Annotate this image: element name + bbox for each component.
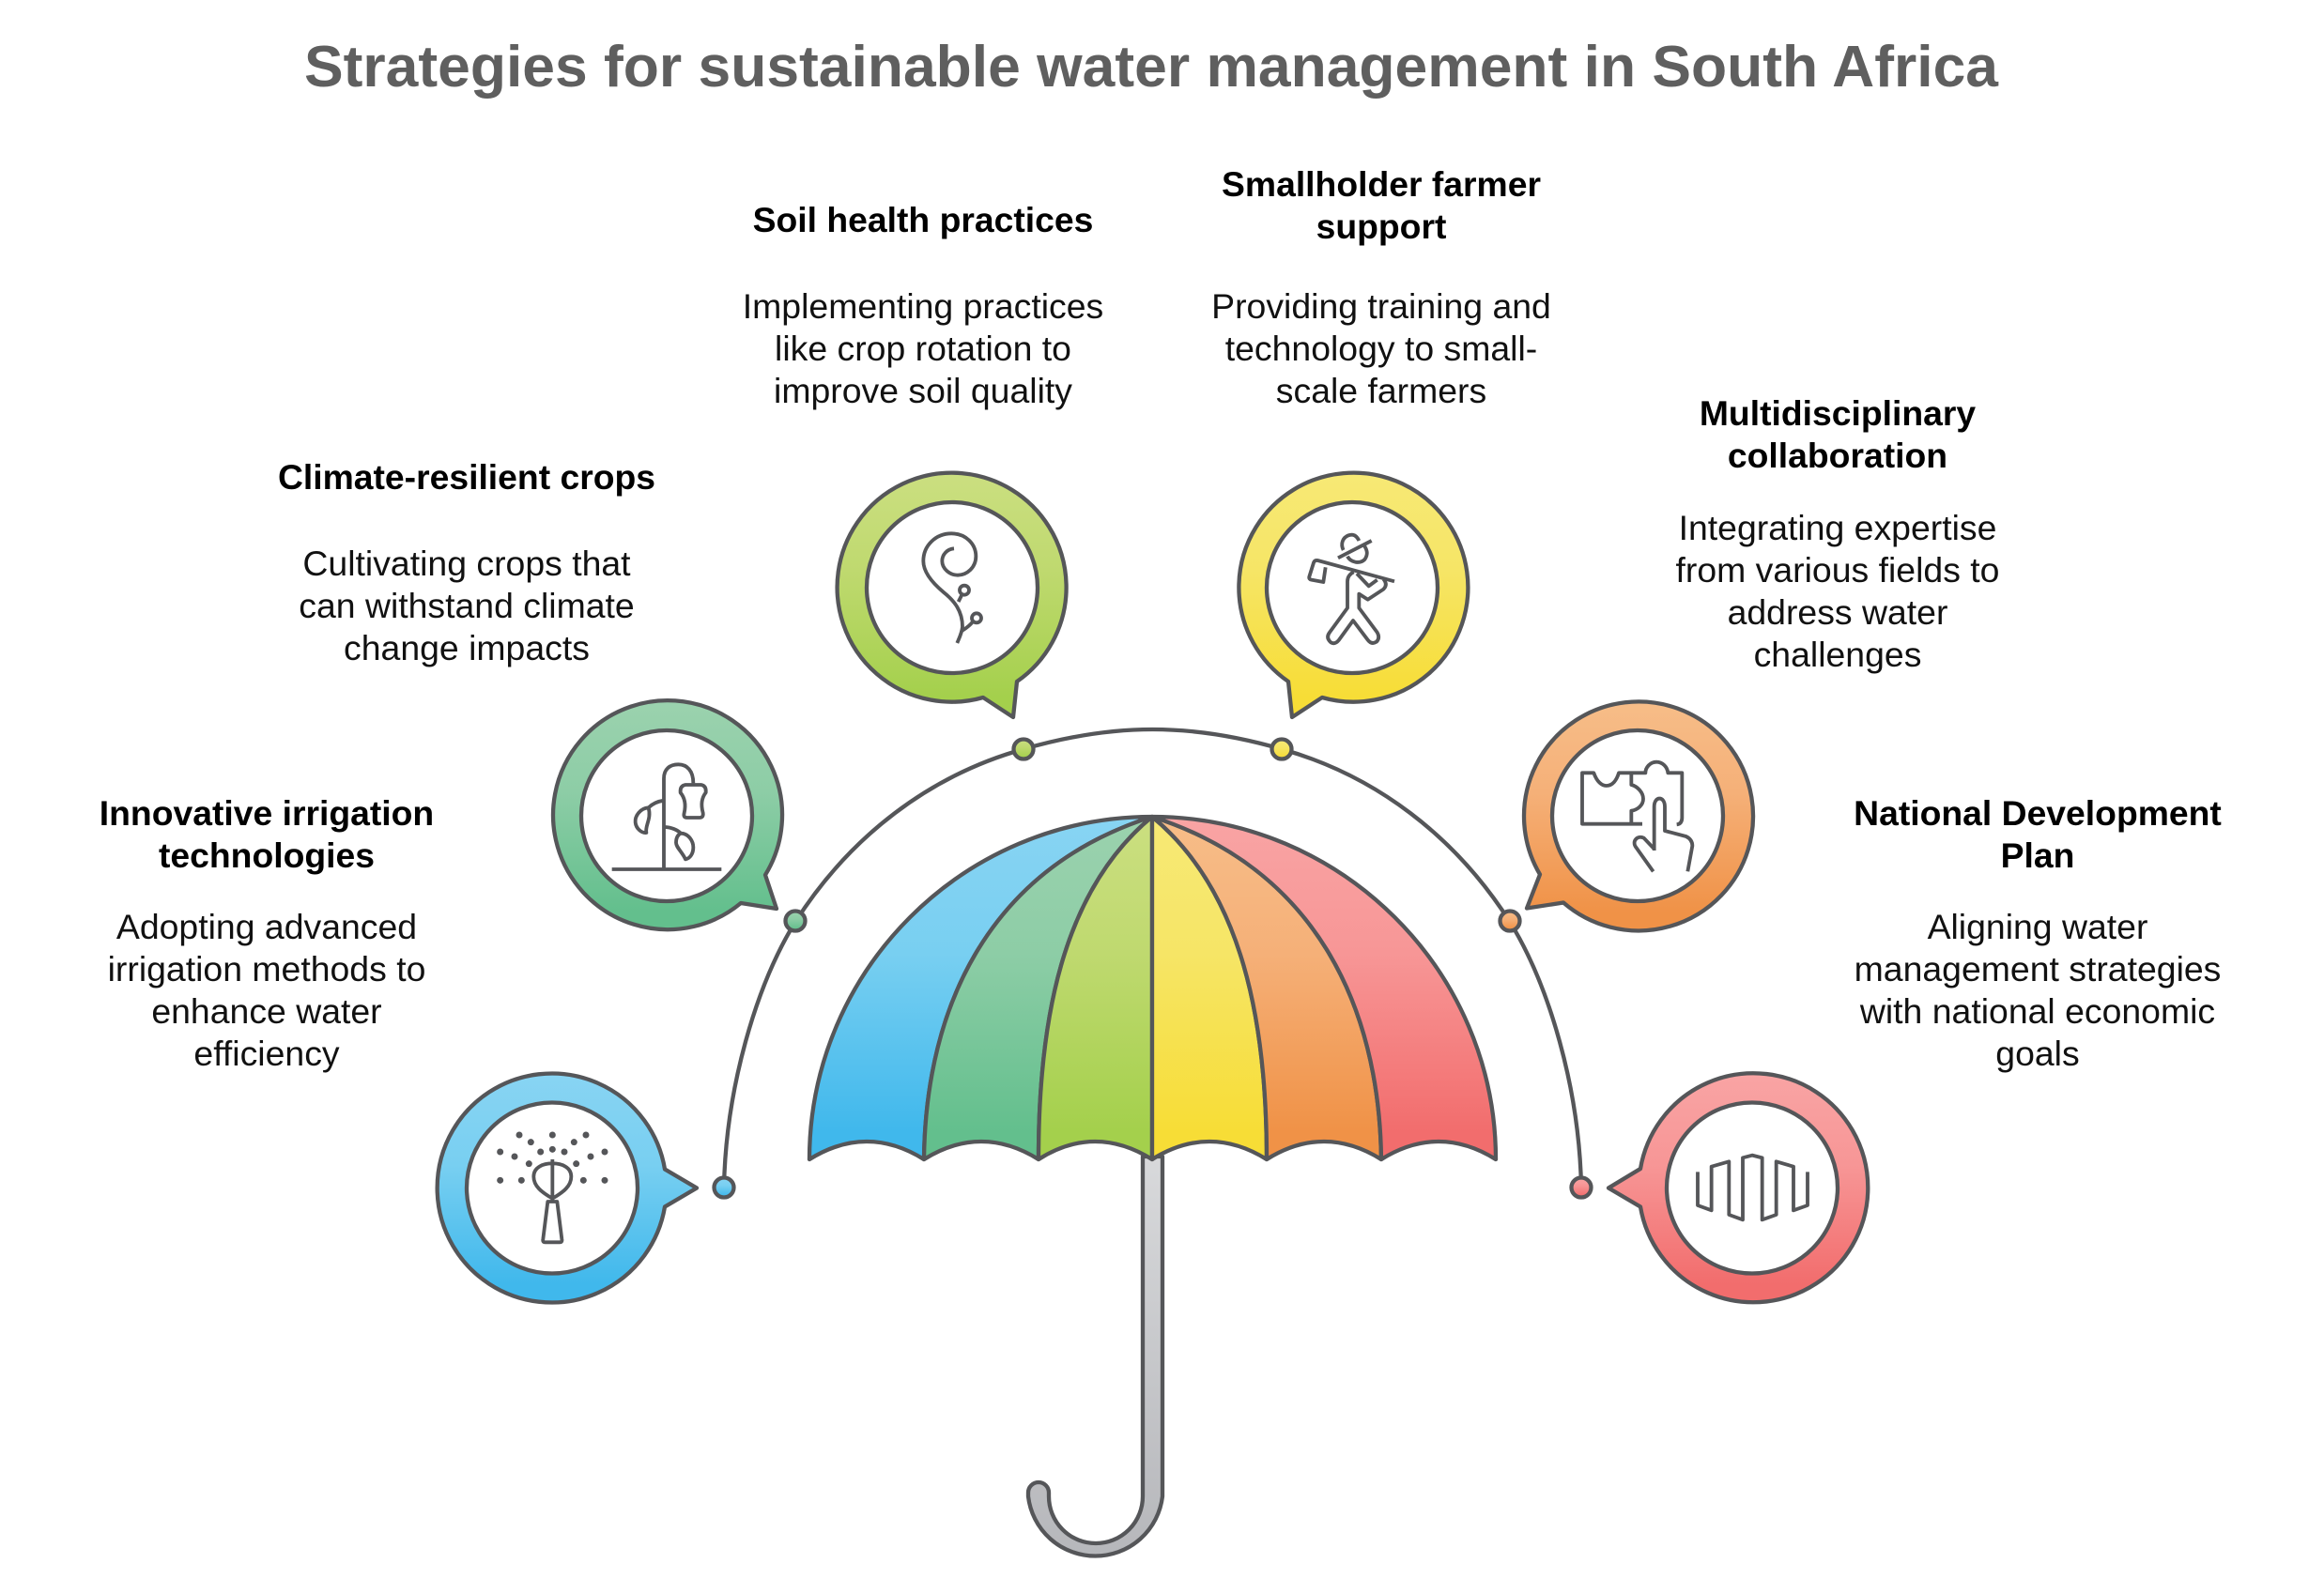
speech bubble: green (553, 700, 782, 929)
label: soil health practices: like crop rotation to (775, 329, 1071, 368)
label: innovative irrigation technologies: enhance water (151, 991, 382, 1031)
item: climate-resilient crops (278, 457, 806, 931)
label: multidisciplinary collaboration: collaboration (1728, 436, 1947, 475)
label: climate-resilient crops (278, 457, 655, 667)
canopy panel: yellow (1152, 817, 1267, 1159)
label: soil health practices (743, 200, 1103, 410)
label: soil health practices: improve soil quality (774, 371, 1072, 410)
connector dot: blue (714, 1177, 734, 1198)
speech bubble: lime (838, 473, 1067, 717)
item: multidisciplinary collaboration (1501, 393, 1999, 931)
label: national development plan: Aligning water (1928, 907, 2147, 946)
label: smallholder farmer support: Smallholder farmer (1222, 164, 1541, 204)
item: innovative irrigation technologies (100, 793, 734, 1302)
item: smallholder farmer support (1211, 164, 1551, 759)
label: national development plan: Plan (2001, 835, 2074, 875)
icon: farmer with hoe (1309, 535, 1394, 643)
connector dot: orange (1501, 911, 1519, 931)
connector dot: red (1572, 1177, 1591, 1198)
canopy panel: lime (1039, 817, 1152, 1159)
label: climate-resilient crops: can withstand climate (299, 586, 635, 625)
umbrella handle (1028, 1157, 1162, 1556)
label: multidisciplinary collaboration: challenges (1754, 635, 1921, 674)
label: national development plan: National Development (1854, 793, 2222, 833)
icon: sprouting spiral (923, 533, 981, 643)
label: national development plan: goals (1995, 1034, 2080, 1073)
title: Strategies for sustainable water management in South Africa (304, 35, 1999, 100)
canopy panel: orange (1152, 817, 1381, 1159)
label: soil health practices: Implementing practices (743, 286, 1103, 326)
label: smallholder farmer support: scale farmers (1276, 371, 1486, 410)
speech bubble: yellow (1239, 473, 1468, 717)
label: smallholder farmer support (1211, 164, 1551, 410)
speech bubble: red (1608, 1073, 1868, 1302)
label: innovative irrigation technologies: efficiency (193, 1034, 340, 1073)
label: smallholder farmer support: technology to small- (1225, 329, 1537, 368)
label: innovative irrigation technologies: Innovative irrigation (100, 793, 434, 833)
label: smallholder farmer support: support (1316, 207, 1446, 246)
icon: folded plan (1698, 1156, 1808, 1219)
label: multidisciplinary collaboration: from various fields to (1676, 550, 1999, 590)
canopy panel: red (1152, 817, 1496, 1159)
label: multidisciplinary collaboration (1676, 393, 1999, 674)
inner circle: orange (1552, 730, 1723, 901)
item: soil health practices (743, 200, 1103, 759)
inner circle: blue (467, 1102, 638, 1273)
label: climate-resilient crops: Climate-resilient crops (278, 457, 655, 497)
label: multidisciplinary collaboration: Integrating expertise (1679, 508, 1996, 547)
inner circle: yellow (1267, 502, 1438, 673)
speech bubble: blue (438, 1073, 697, 1302)
label: innovative irrigation technologies: Adopting advanced (116, 907, 417, 946)
label: smallholder farmer support: Providing training and (1211, 286, 1551, 326)
icon: puzzle and hand (1582, 762, 1692, 871)
inner circle: green (581, 730, 752, 901)
inner circle: red (1667, 1102, 1838, 1273)
label: climate-resilient crops: Cultivating crops that (302, 544, 631, 583)
canopy panel: blue (809, 817, 1152, 1159)
icon: sprinkler (497, 1131, 608, 1242)
label: national development plan (1854, 793, 2222, 1073)
icon: wilting plant (612, 764, 721, 869)
label: climate-resilient crops: change impacts (344, 628, 590, 667)
label: national development plan: management strategies (1855, 949, 2221, 989)
label: soil health practices: Soil health practices (753, 200, 1093, 239)
label: multidisciplinary collaboration: Multidisciplinary (1700, 393, 1976, 433)
item: national development plan (1572, 793, 2222, 1302)
label: multidisciplinary collaboration: address water (1728, 592, 1947, 632)
canopy panel: green (924, 817, 1152, 1159)
connector arc (724, 729, 1581, 1188)
label: innovative irrigation technologies (100, 793, 434, 1073)
connector dot: yellow (1271, 740, 1292, 759)
inner circle: lime (867, 502, 1038, 673)
connector dot: green (785, 911, 806, 931)
label: innovative irrigation technologies: irrigation methods to (108, 949, 425, 989)
speech bubble: orange (1524, 701, 1753, 930)
umbrella canopy (809, 817, 1496, 1159)
connector dot: lime (1014, 740, 1033, 759)
label: national development plan: with national economic (1859, 991, 2215, 1031)
label: innovative irrigation technologies: technologies (159, 835, 375, 875)
